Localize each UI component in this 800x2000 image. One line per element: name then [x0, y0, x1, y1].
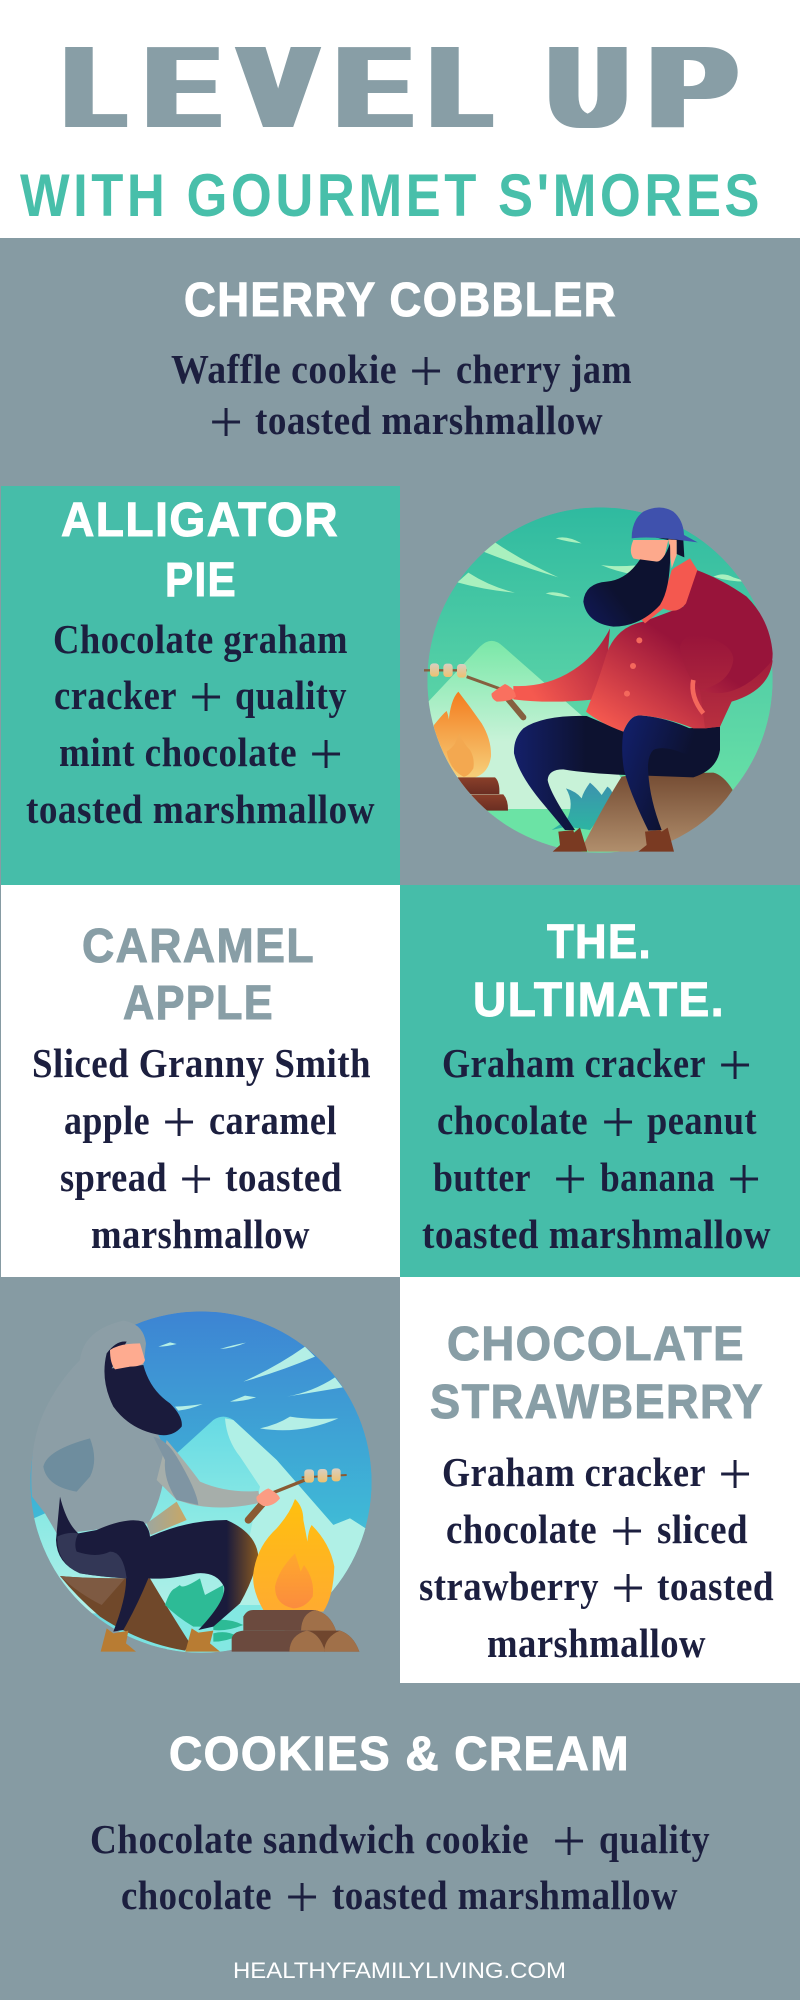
text: alligator pie recipe: Chocolate graham [53, 616, 348, 662]
text: cookies and cream recipe: + [285, 1864, 319, 1930]
title: LEVEL UP: L [66, 22, 123, 152]
text: chocolate strawberry recipe: + [718, 1441, 752, 1507]
face [631, 540, 668, 562]
coat sleeve [153, 1437, 261, 1508]
heading: alligator pie: PIE [165, 554, 237, 607]
text: caramel apple recipe: toasted [225, 1154, 342, 1200]
heading: caramel apple [82, 920, 315, 1030]
text: alligator pie recipe: mint chocolate [59, 729, 297, 775]
text: caramel apple recipe: spread [60, 1154, 167, 1200]
heading: cherry cobbler: CHERRY COBBLER [184, 274, 617, 327]
text: cookies and cream recipe: quality [599, 1816, 710, 1862]
title: LEVEL UP: E [147, 22, 218, 152]
text: the ultimate recipe: peanut [647, 1097, 757, 1143]
text: alligator pie recipe: toasted marshmallow [26, 786, 375, 832]
panel: the ultimate [400, 885, 800, 1277]
water band [166, 1605, 264, 1653]
leg highlight [57, 1533, 127, 1578]
heading: the ultimate: ULTIMATE. [473, 974, 725, 1027]
text: chocolate strawberry recipe: sliced [657, 1506, 748, 1552]
text: the ultimate recipe: banana [600, 1154, 715, 1200]
text: cherry cobbler recipe [171, 338, 632, 455]
shirt sleeve and pocket [680, 635, 773, 728]
text: the ultimate recipe: butter [433, 1154, 531, 1200]
face [110, 1343, 145, 1369]
text: cherry cobbler recipe: + [409, 338, 443, 404]
text: cherry cobbler recipe: toasted marshmallow [255, 397, 603, 443]
clouds [158, 1342, 343, 1430]
text: alligator pie recipe: + [309, 721, 343, 787]
text: cookies and cream recipe: toasted marshmallow [332, 1872, 678, 1918]
title: LEVEL UP [66, 22, 735, 152]
hand [492, 684, 516, 702]
heading: chocolate strawberry: STRAWBERRY [430, 1376, 764, 1429]
text: the ultimate recipe [422, 1032, 771, 1257]
bush [165, 1578, 243, 1642]
text: cherry cobbler recipe: Waffle cookie [171, 346, 397, 392]
coat [31, 1321, 165, 1533]
panel: caramel apple [1, 885, 400, 1277]
fire [253, 1499, 334, 1612]
text: chocolate strawberry recipe: + [611, 1555, 645, 1621]
text: chocolate strawberry recipe: + [610, 1498, 644, 1564]
hair [104, 1341, 182, 1435]
text: chocolate strawberry recipe: chocolate [446, 1506, 597, 1552]
collar [642, 558, 697, 623]
heading: the ultimate: THE. [547, 916, 652, 969]
text: chocolate strawberry recipe: strawberry [419, 1563, 599, 1609]
fire [430, 692, 491, 777]
heading: the ultimate [473, 916, 725, 1027]
text: chocolate strawberry recipe: toasted [657, 1563, 774, 1609]
heading: alligator pie: ALLIGATOR [61, 494, 339, 547]
text: alligator pie recipe: cracker [54, 672, 177, 718]
illustration: person at campfire [30, 1311, 373, 1653]
rock [583, 773, 733, 852]
heading: chocolate strawberry [430, 1318, 764, 1429]
text: the ultimate recipe: + [553, 1146, 587, 1212]
beard [583, 543, 670, 627]
neck and hair [655, 537, 684, 568]
title: LEVEL UP: L [432, 22, 489, 152]
text: caramel apple recipe: marshmallow [91, 1211, 310, 1257]
heading: caramel apple: APPLE [123, 977, 274, 1030]
rock [60, 1576, 190, 1651]
text: alligator pie recipe [26, 616, 375, 832]
text: the ultimate recipe: Graham cracker [442, 1040, 706, 1086]
text: chocolate strawberry recipe: marshmallow [487, 1620, 706, 1666]
text: caramel apple recipe: caramel [209, 1097, 337, 1143]
clouds [457, 537, 747, 597]
text: cherry cobbler recipe: + [209, 389, 243, 455]
text: alligator pie recipe: quality [235, 672, 347, 718]
mountain [428, 641, 640, 810]
text: the ultimate recipe: chocolate [437, 1097, 588, 1143]
text: cookies and cream recipe: + [552, 1808, 586, 1874]
text: the ultimate recipe: + [727, 1146, 761, 1212]
logs [453, 777, 508, 811]
sky circle [30, 1311, 372, 1653]
coat pocket [43, 1438, 94, 1492]
stick with marshmallows [248, 1468, 347, 1520]
boots [101, 1628, 220, 1652]
title: LEVEL UP: U [550, 22, 626, 152]
illustration: bearded man at campfire [424, 507, 773, 857]
text: cookies and cream recipe: Chocolate sandwich cookie [90, 1816, 529, 1862]
title: LEVEL UP: P [650, 22, 735, 152]
text: cookies and cream recipe: chocolate [121, 1872, 272, 1918]
text: cherry cobbler recipe: cherry jam [456, 346, 632, 392]
panel: cookies and cream [90, 1728, 710, 1930]
text: cookies and cream recipe [90, 1808, 710, 1930]
hand [256, 1488, 280, 1506]
text: caramel apple recipe: + [179, 1146, 213, 1212]
ground [486, 809, 620, 853]
boots [553, 828, 674, 852]
title: LEVEL UP: E [338, 22, 410, 152]
text: the ultimate recipe: + [601, 1089, 635, 1155]
heading: chocolate strawberry: CHOCOLATE [447, 1318, 745, 1371]
text: the ultimate recipe: + [718, 1032, 752, 1098]
text: caramel apple recipe: + [162, 1089, 196, 1155]
logs [232, 1610, 359, 1652]
panel: alligator pie [1, 486, 400, 885]
heading: cookies and cream: COOKIES & CREAM [169, 1728, 630, 1781]
text: caramel apple recipe: apple [64, 1097, 150, 1143]
shirt [586, 570, 773, 732]
text: caramel apple recipe: Sliced Granny Smith [32, 1040, 371, 1086]
sky circle [427, 507, 773, 853]
title: LEVEL UP: V [241, 22, 315, 152]
panel: cherry cobbler [171, 274, 632, 455]
mountain [30, 1417, 373, 1613]
text: the ultimate recipe: toasted marshmallow [422, 1211, 771, 1257]
text: caramel apple recipe [32, 1040, 371, 1257]
heading: caramel apple: CARAMEL [82, 920, 315, 973]
belt [147, 1502, 187, 1535]
text: chocolate strawberry recipe [419, 1441, 774, 1666]
bush [552, 783, 613, 830]
footer: website: HEALTHYFAMILYLIVING.COM [233, 1958, 566, 1983]
legs [56, 1497, 258, 1632]
text: alligator pie recipe: + [189, 664, 223, 730]
panel: chocolate strawberry [400, 1277, 800, 1683]
buttons [624, 637, 642, 697]
stick with marshmallows [424, 663, 523, 717]
text: chocolate strawberry recipe: Graham cracker [442, 1449, 706, 1495]
arm [513, 628, 610, 702]
front leg [622, 715, 702, 831]
back leg [514, 716, 720, 830]
hat [632, 507, 698, 542]
heading: alligator pie [61, 494, 339, 607]
